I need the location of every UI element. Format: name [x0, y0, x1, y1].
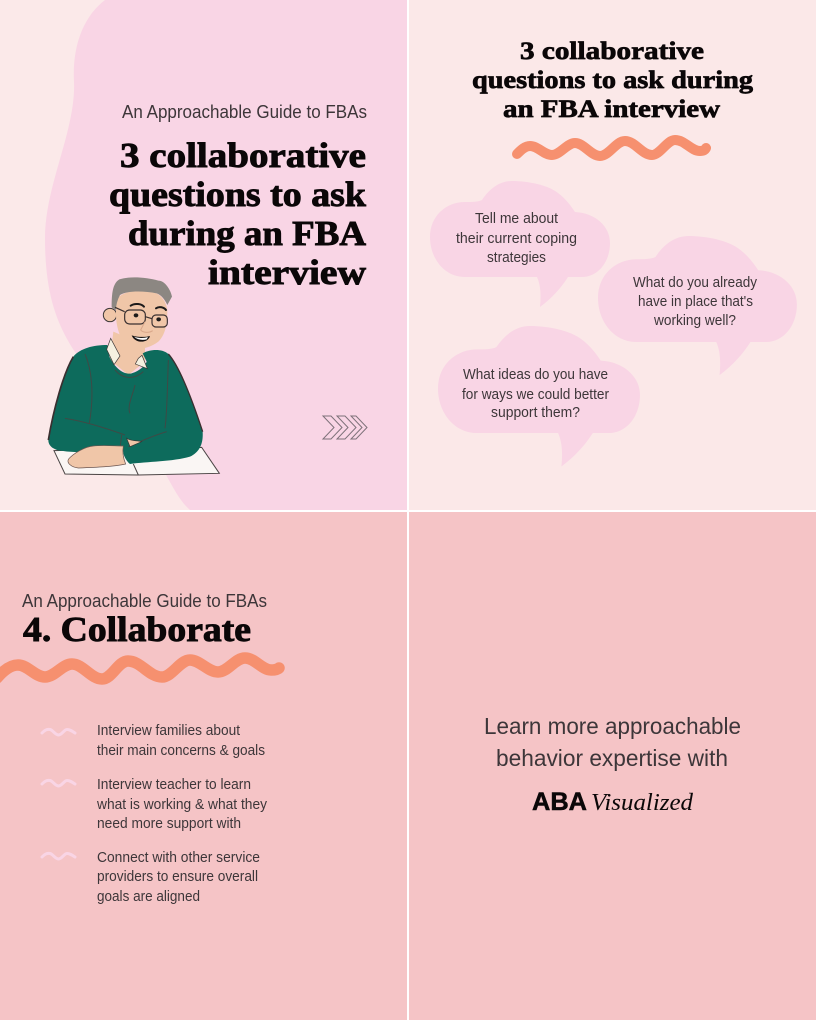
panel: cover [0, 0, 407, 510]
call to action text: Learn more approachable [484, 713, 741, 739]
bubble text: working well? [653, 313, 736, 329]
item text: their main concerns & goals [97, 743, 265, 759]
bullet wave [42, 780, 75, 786]
item text: providers to ensure overall [97, 869, 258, 885]
shirt collar [107, 338, 147, 369]
bubble text: their current coping [456, 231, 577, 247]
item text [97, 723, 265, 759]
panel: collaborate [0, 512, 407, 1020]
bubble text: Tell me about [475, 211, 558, 227]
bullet wave [42, 853, 75, 859]
panel: learn more [409, 512, 816, 1020]
bubble text: have in place that's [638, 294, 753, 310]
wave divider [517, 140, 706, 156]
panel: three questions [409, 0, 816, 510]
icon: next arrows [323, 416, 367, 439]
bubble text [456, 211, 577, 266]
questions heading: an FBA interview [503, 96, 720, 123]
list item: service providers [42, 850, 260, 905]
item text [96, 777, 268, 832]
cover title: questions to ask [109, 175, 367, 214]
item text: goals are aligned [97, 889, 200, 905]
wave divider [0, 658, 279, 679]
call to action text [484, 713, 741, 771]
call to action text: behavior expertise with [496, 745, 728, 771]
bullet wave [42, 729, 75, 735]
cover title: interview [208, 253, 367, 292]
speech bubble: working well [598, 236, 797, 375]
item text: Interview teacher to learn [97, 777, 251, 793]
questions heading: questions to ask during [472, 67, 754, 94]
bubble text [633, 275, 758, 329]
bubble text [462, 367, 609, 421]
cover title: 3 collaborative [120, 136, 366, 175]
speech bubble: ideas for support [438, 326, 640, 466]
cover subtitle: An Approachable Guide to FBAs [122, 102, 367, 122]
speech bubble: coping strategies [430, 181, 610, 307]
logo: ABA Visualized [532, 788, 694, 816]
item text: need more support with [97, 816, 241, 832]
logo: ABA Visualized: ABA [532, 788, 587, 816]
bubble text: strategies [487, 250, 546, 266]
item text [97, 850, 260, 905]
bubble text: support them? [491, 405, 580, 421]
list item: families [42, 723, 265, 759]
questions heading [472, 38, 754, 123]
cover title [109, 136, 367, 292]
questions heading: 3 collaborative [520, 38, 704, 65]
item text: Connect with other service [97, 850, 260, 866]
list item: teacher [42, 777, 268, 832]
bubble text: What ideas do you have [463, 367, 608, 383]
background blob [45, 0, 407, 510]
collaborate heading: 4. Collaborate [23, 610, 251, 649]
item text: Interview families about [97, 723, 240, 739]
item text: what is working & what they [96, 797, 268, 813]
bubble text: for ways we could better [462, 387, 609, 403]
illustration: man in green sweater at desk [48, 277, 219, 475]
logo: ABA Visualized: Visualized [591, 790, 694, 816]
collaborate subtitle: An Approachable Guide to FBAs [22, 591, 267, 611]
bubble text: What do you already [633, 275, 758, 291]
cover title: during an FBA [128, 214, 367, 253]
